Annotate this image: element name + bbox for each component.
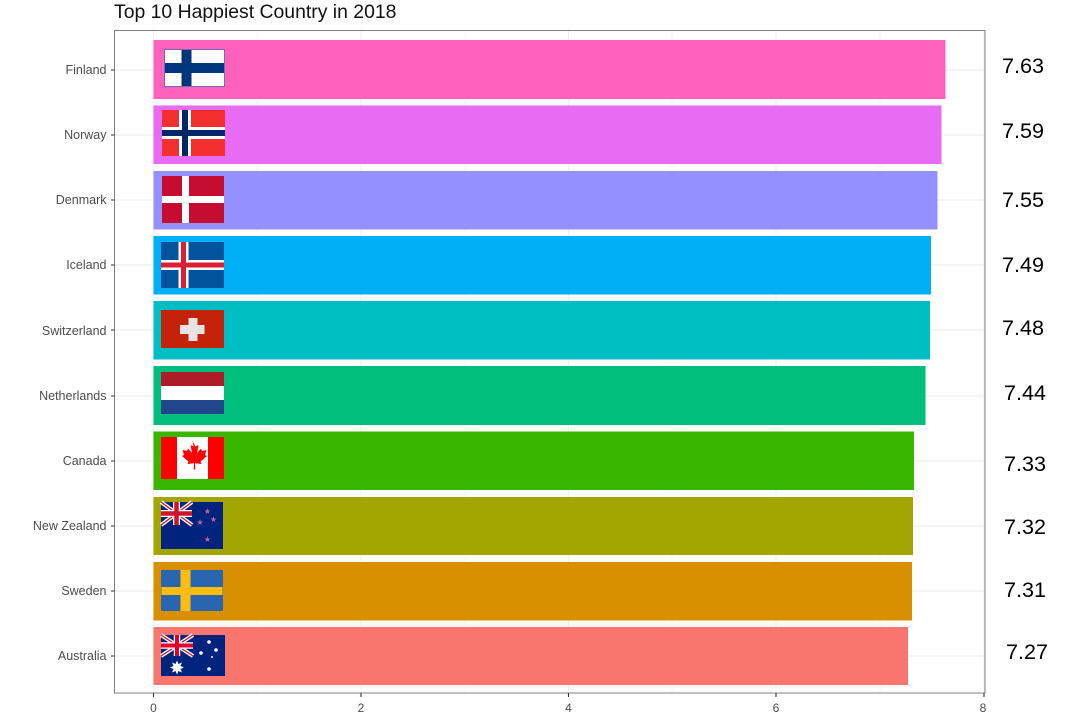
- bar: Finland: [154, 40, 946, 99]
- bar: New Zealand: [154, 497, 913, 555]
- x axis labels: 4: [565, 701, 572, 715]
- bar: Canada: [154, 432, 914, 490]
- y axis labels: New Zealand: [33, 519, 107, 533]
- title: Top 10 Happiest Country in 2018: [114, 1, 396, 23]
- x axis labels: [150, 693, 987, 715]
- value labels: 7.33: [1004, 453, 1046, 476]
- x axis labels: 0: [150, 701, 157, 715]
- bar: Norway: [154, 106, 942, 164]
- x axis labels: 2: [358, 701, 365, 715]
- value labels: 7.55: [1002, 189, 1044, 212]
- icon: flag Finland: [164, 50, 224, 86]
- y axis labels: Australia: [58, 649, 107, 663]
- y axis labels: Norway: [64, 128, 107, 142]
- icon: flag Denmark: [162, 176, 224, 223]
- y axis labels: Switzerland: [42, 324, 107, 338]
- bar: Netherlands: [154, 366, 926, 425]
- icon: flag New Zealand: ★: [204, 535, 211, 544]
- icon: flag Australia: [161, 635, 225, 676]
- bar: Denmark: [154, 171, 938, 230]
- value labels: 7.63: [1002, 55, 1044, 78]
- bar: Sweden: [154, 562, 912, 620]
- value labels: 7.49: [1002, 254, 1044, 277]
- y axis labels: Finland: [66, 63, 107, 77]
- icon: flag New Zealand: ★: [196, 518, 204, 527]
- icon: flag Iceland: [161, 242, 224, 288]
- y axis labels: Canada: [63, 454, 107, 468]
- x axis labels: 6: [773, 701, 780, 715]
- value labels: 7.32: [1004, 516, 1046, 539]
- icon: flag New Zealand: [161, 502, 223, 549]
- value labels: 7.27: [1006, 641, 1048, 664]
- icon: flag Canada: [161, 437, 224, 479]
- icon: flag Netherlands: [161, 372, 224, 414]
- panel border: [114, 30, 985, 693]
- value labels: 7.31: [1004, 579, 1046, 602]
- x axis labels: 8: [980, 701, 987, 715]
- value labels: 7.44: [1004, 382, 1046, 405]
- value labels: [1002, 55, 1048, 664]
- chart panel: [114, 30, 985, 693]
- value labels: 7.59: [1002, 120, 1044, 143]
- value labels: 7.48: [1002, 317, 1044, 340]
- y axis labels: Sweden: [61, 584, 107, 598]
- y axis labels: Iceland: [66, 258, 107, 272]
- bar: Australia: [154, 627, 908, 685]
- icon: flag Norway: [162, 110, 225, 156]
- icon: flag Switzerland: [161, 310, 224, 348]
- icon: flag New Zealand: ★: [204, 507, 211, 516]
- icon: flag New Zealand: ★: [210, 515, 217, 524]
- y axis labels: Netherlands: [39, 389, 106, 403]
- bar: Switzerland: [154, 301, 930, 360]
- y axis labels: [33, 63, 114, 663]
- y axis labels: Denmark: [56, 193, 107, 207]
- bar: Iceland: [154, 236, 931, 294]
- icon: flag Sweden: [161, 570, 223, 611]
